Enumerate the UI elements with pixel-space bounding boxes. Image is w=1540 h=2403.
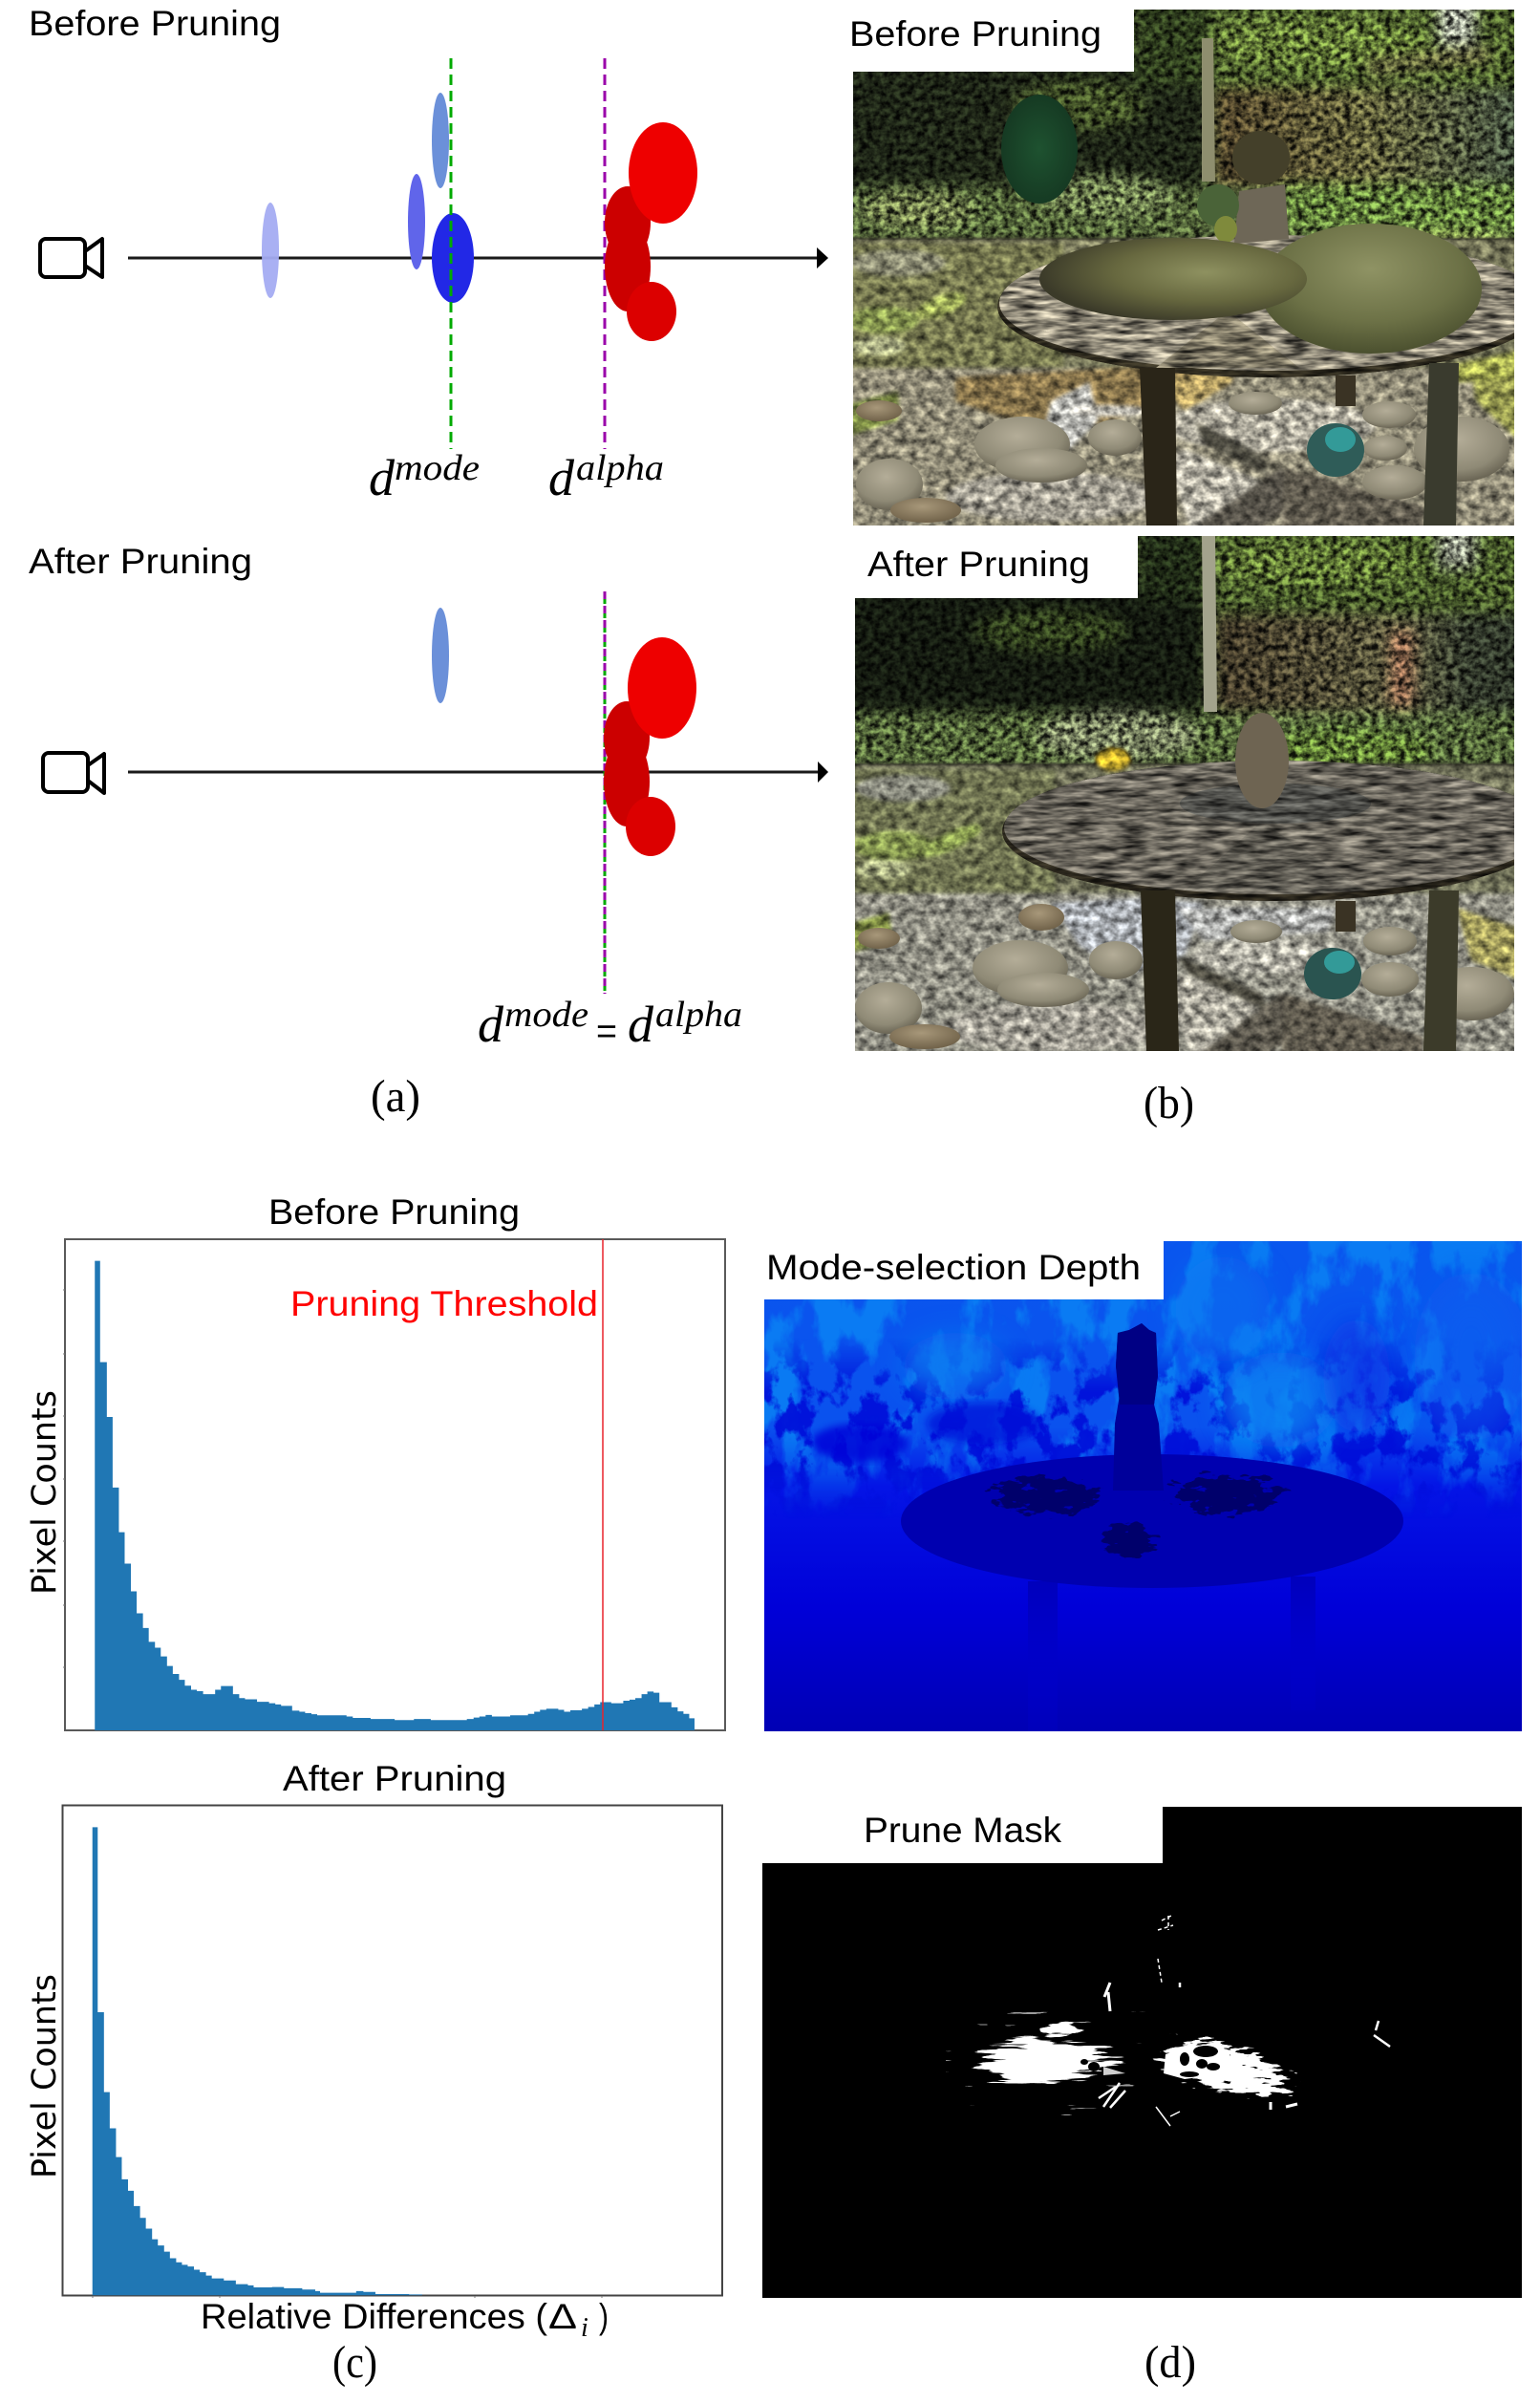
- label background and heading: Mode-selection Depth: [759, 1233, 1164, 1299]
- panel: (b) render before pruning: [852, 10, 1514, 526]
- label: d mode: [369, 448, 480, 506]
- heading: Before Pruning: Before Pruning: [268, 1192, 520, 1232]
- line: alpha depth: [604, 58, 606, 449]
- ellipse: faint blue gaussian: [262, 203, 279, 298]
- stump edge mask specks: [1104, 1916, 1390, 2047]
- heading: Before Pruning: Before Pruning: [29, 4, 281, 43]
- y axis ticks: [63, 1290, 65, 1667]
- mask image: [762, 1807, 1522, 2298]
- histogram bars: [95, 1261, 695, 1730]
- label background and heading: After Pruning: After Pruning: [867, 545, 1090, 584]
- label background and heading: Prune Mask: Prune Mask: [864, 1811, 1062, 1850]
- label background and heading: Mode-selection Depth: Mode-selection Depth: [766, 1248, 1141, 1287]
- x axis label: Relative Differences (: [201, 2297, 548, 2336]
- table legs, stump and ball: [1141, 536, 1459, 1051]
- lines: coincident mode and alpha depth: [604, 591, 606, 994]
- label: d mode equals d alpha: alpha: [655, 995, 742, 1035]
- table legs, stump and ball: [1140, 38, 1459, 526]
- panel: (a) ray diagram after pruning: [29, 542, 828, 1053]
- panel: (a) ray diagram before pruning: [29, 4, 828, 506]
- panel: (d) prune mask: [759, 1801, 1522, 2298]
- red gaussians cluster: [605, 122, 697, 341]
- table top: [997, 235, 1540, 377]
- lower centre mask streaks: [1099, 2083, 1297, 2126]
- label: d mode equals d alpha: mode: [504, 995, 588, 1035]
- label: d mode: mode: [395, 448, 480, 488]
- axes frame: [65, 1239, 725, 1730]
- threshold line: [602, 1239, 604, 1730]
- label: d mode: d: [369, 449, 396, 506]
- y axis label: Pixel Counts: [26, 1974, 64, 2178]
- line: mode depth: [449, 58, 453, 449]
- ellipse: medium blue gaussian: [408, 174, 425, 269]
- panel: (c) histogram after pruning: [26, 1759, 722, 2343]
- icon: camera: [40, 239, 102, 277]
- scene image: garden without floaters: [855, 536, 1514, 1051]
- rocks on the ground: [855, 904, 1514, 1049]
- histogram bars: [93, 1827, 422, 2295]
- icon: camera: [43, 753, 104, 793]
- ellipse: steel blue gaussian: [432, 608, 449, 703]
- caption: (d): (d): [1144, 2337, 1196, 2388]
- floater: left olive ellipsoid: [1039, 238, 1307, 320]
- heading: After Pruning: After Pruning: [283, 1759, 506, 1798]
- label: d mode equals d alpha: =: [596, 1012, 617, 1052]
- x axis label: Δ: [548, 2297, 577, 2336]
- floater: dark green ellipsoid: [1001, 95, 1078, 204]
- label: d alpha: [548, 448, 664, 506]
- label background and heading: After Pruning: [841, 528, 1138, 598]
- rocks on the ground: [856, 392, 1509, 523]
- right table mask region: [1152, 2033, 1301, 2098]
- label background and heading: Before Pruning: [841, 0, 1134, 72]
- label background and heading: Before Pruning: Before Pruning: [849, 14, 1102, 54]
- arrow: camera ray: [128, 762, 828, 783]
- panel: (b) render after pruning: [855, 536, 1514, 1051]
- label: d alpha: d: [548, 449, 575, 506]
- panel: (c) histogram before pruning: [26, 1192, 725, 1730]
- caption: (c): (c): [332, 2337, 377, 2388]
- scene image: garden with floaters: [853, 10, 1514, 526]
- label: d mode equals d alpha: d: [478, 996, 504, 1053]
- axes frame: [63, 1806, 722, 2295]
- caption: (b): (b): [1144, 1078, 1194, 1128]
- floater: right olive ellipsoid: [1260, 224, 1482, 354]
- table top: [1002, 761, 1540, 901]
- x axis ticks: [93, 2296, 602, 2298]
- ellipse: steel blue gaussian: [432, 93, 449, 188]
- y axis label: Pixel Counts: [26, 1390, 64, 1595]
- x axis label: ): [599, 2297, 609, 2336]
- label: d alpha: alpha: [576, 448, 664, 488]
- depth map image: [764, 1241, 1529, 1731]
- red gaussians cluster: [604, 637, 696, 856]
- left table mask region: [957, 2021, 1129, 2091]
- panel: (d) mode-selection depth: [759, 1233, 1529, 1731]
- label: d mode equals d alpha: [478, 995, 742, 1053]
- x axis label: i: [581, 2313, 588, 2343]
- ellipse: dark blue gaussian: [432, 213, 474, 303]
- caption: (a): (a): [371, 1071, 420, 1122]
- label background and heading: Prune Mask: [759, 1801, 1163, 1863]
- threshold label: Pruning Threshold: [290, 1284, 598, 1323]
- heading: After Pruning: After Pruning: [29, 542, 252, 581]
- arrow: camera ray: [128, 247, 828, 268]
- label: d mode equals d alpha: d: [628, 996, 654, 1053]
